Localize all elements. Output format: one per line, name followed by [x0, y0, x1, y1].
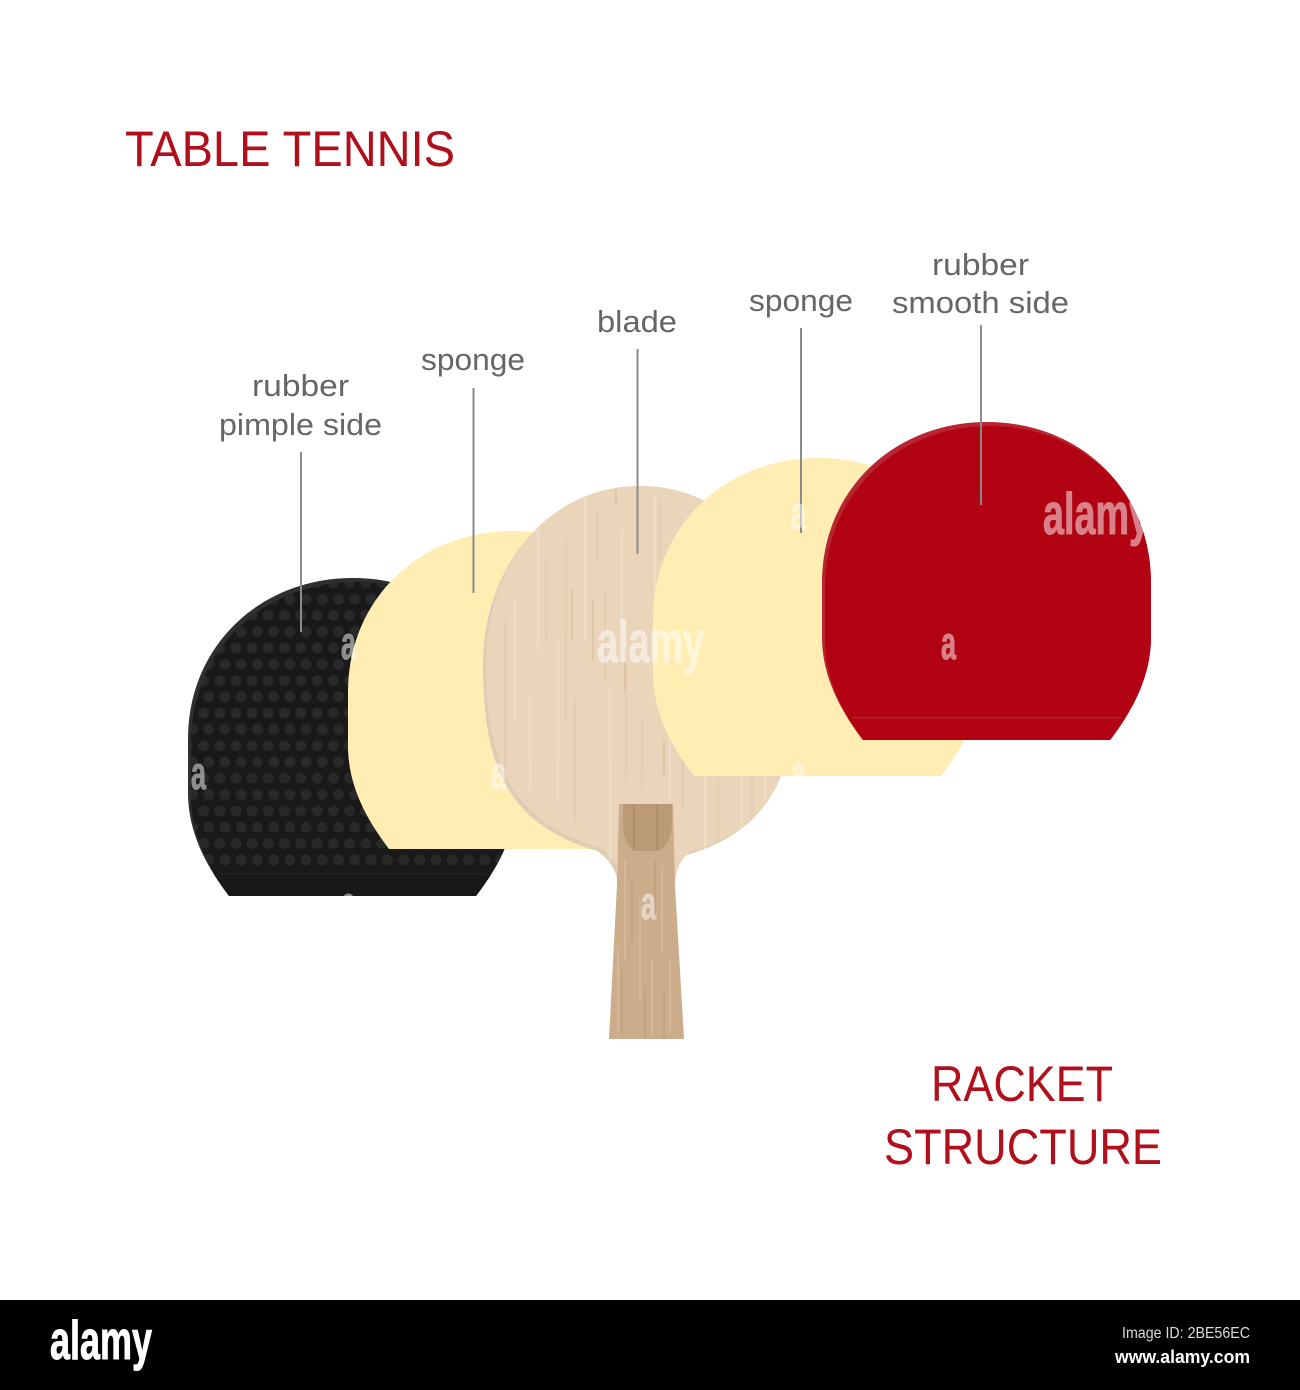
label: rubber pimple side: pimple side — [219, 407, 382, 442]
pimple dots texture — [188, 578, 517, 868]
label: sponge right: sponge — [749, 283, 853, 318]
handle inner insert — [623, 804, 672, 851]
watermarks: alamy — [597, 610, 704, 675]
label: rubber smooth side: rubber — [932, 247, 1029, 282]
label: rubber pimple side: rubber — [252, 368, 349, 403]
sponge, left — [348, 531, 677, 849]
watermarks: a — [191, 747, 206, 799]
rubber pimple side pad — [188, 578, 504, 896]
watermarks: a — [341, 877, 356, 929]
watermarks: a — [791, 487, 806, 539]
watermarks: a — [941, 617, 956, 669]
leader lines — [301, 325, 981, 632]
blade head — [483, 483, 800, 885]
footer url: www.alamy.com — [1114, 1347, 1250, 1367]
label: sponge left: sponge — [421, 342, 525, 377]
footer logo: alamy — [50, 1309, 152, 1371]
title: table tennis: TABLE TENNIS — [125, 121, 455, 177]
rubber smooth side pad — [812, 422, 1162, 748]
heading: racket structure: STRUCTURE — [884, 1119, 1162, 1175]
watermarks: a — [341, 617, 356, 669]
handle — [609, 804, 684, 1039]
footer image id: Image ID: 2BE56EC — [1122, 1325, 1250, 1342]
label: blade: blade — [597, 304, 677, 339]
watermarks: alamy — [1043, 482, 1150, 547]
sponge, right — [653, 458, 982, 776]
label: rubber pimple side — [219, 368, 382, 442]
watermarks: a — [491, 747, 506, 799]
watermarks: a — [641, 877, 656, 929]
label: rubber smooth side: smooth side — [892, 285, 1069, 320]
footer bar — [0, 1300, 1300, 1390]
heading: racket structure — [884, 1056, 1162, 1175]
label: rubber smooth side — [892, 247, 1069, 320]
heading: racket structure: RACKET — [931, 1056, 1113, 1112]
watermarks: a — [791, 747, 806, 799]
blade with handle — [483, 483, 800, 1039]
watermarks — [191, 482, 1150, 929]
